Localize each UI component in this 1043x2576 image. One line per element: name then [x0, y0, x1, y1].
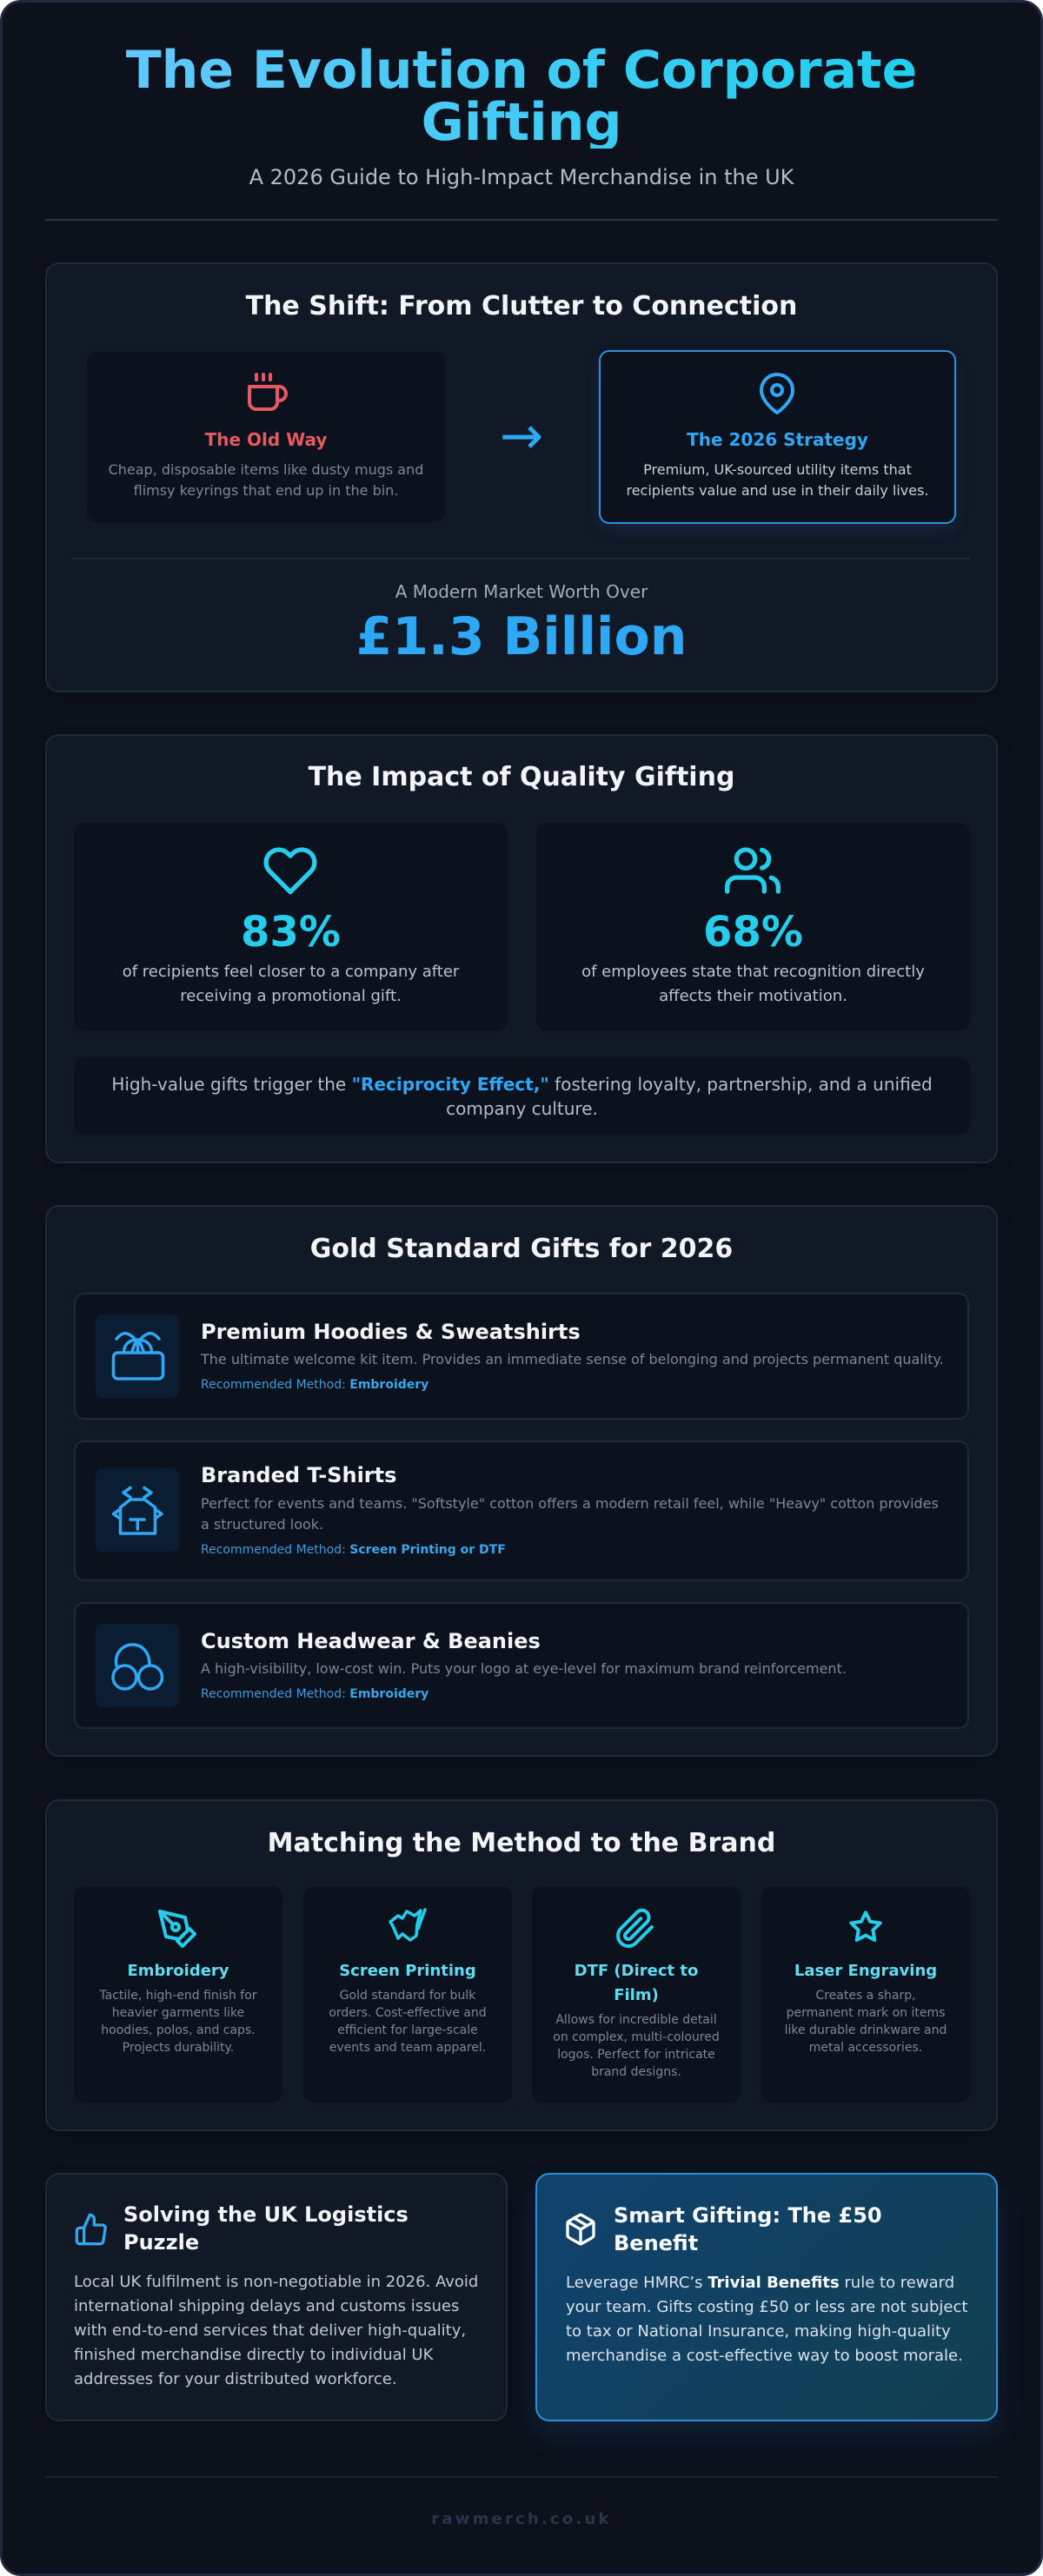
market label: A Modern Market Worth Over: [395, 581, 648, 602]
panel: gold standard gifts: [45, 1205, 998, 1757]
gift title: Custom Headwear & Beanies: [201, 1629, 541, 1653]
method description: Projects durability.: [123, 2041, 234, 2055]
smart gifting body: your team. Gifts costing £50 or less are not subject: [566, 2298, 967, 2316]
method title: Laser Engraving: [794, 1962, 937, 1980]
method description: brand designs.: [591, 2065, 681, 2079]
heading: impact: The Impact of Quality Gifting: [309, 762, 734, 792]
stat description: [581, 963, 925, 1005]
smart gifting title: Benefit: [614, 2231, 698, 2255]
logistics body: Local UK fulfilment is non-negotiable in 2026. Avoid: [74, 2273, 478, 2291]
smart gifting title: [614, 2203, 882, 2255]
gift description: Perfect for events and teams. "Softstyle" cotton offers a modern retail feel, while "Heavy" cotton provides: [201, 1495, 939, 1512]
heading: matching the method: Matching the Method to the Brand: [268, 1828, 775, 1858]
smart gifting body: merchandise a cost-effective way to boost morale.: [566, 2347, 963, 2365]
old way description: flimsy keyrings that end up in the bin.: [134, 482, 398, 499]
gift description: A high-visibility, low-cost win. Puts your logo at eye-level for maximum brand reinforcement.: [201, 1660, 847, 1677]
logistics title: Solving the UK Logistics: [123, 2202, 409, 2227]
stat card: 68%: [536, 823, 970, 1030]
smart gifting body: Leverage HMRC’s Trivial Benefits rule to reward: [566, 2274, 954, 2292]
recommended method: Recommended Method: Embroidery: [201, 1687, 428, 1701]
method card: embroidery: [74, 1886, 282, 2103]
strategy description: recipients value and use in their daily lives.: [626, 482, 929, 499]
old way description: [109, 461, 423, 499]
smart gifting title: Smart Gifting: The £50: [614, 2203, 882, 2228]
logistics body: international shipping delays and customs issues: [74, 2297, 459, 2315]
callout text: company culture.: [446, 1098, 598, 1119]
stat description: receiving a promotional gift.: [180, 987, 402, 1005]
stat description: affects their motivation.: [659, 987, 847, 1005]
method description: hoodies, polos, and caps.: [101, 2023, 256, 2037]
icon: users: [725, 847, 781, 894]
strategy description: Premium, UK-sourced utility items that: [643, 461, 912, 478]
logistics body: addresses for your distributed workforce.: [74, 2370, 397, 2388]
method title: [575, 1962, 698, 2004]
method description: metal accessories.: [809, 2041, 922, 2055]
subtitle: A 2026 Guide to High-Impact Merchandise in the UK: [249, 165, 794, 189]
icon: coffee mug: [248, 373, 288, 411]
panel: the shift: [45, 262, 998, 692]
strategy title: The 2026 Strategy: [687, 429, 868, 450]
icon tile: hoodie: [96, 1314, 179, 1398]
method description: [785, 1989, 947, 2055]
gift item: headwear: [74, 1602, 969, 1729]
callout text: High-value gifts trigger the "Reciprocity Effect," fostering loyalty, partnership, and a unified: [111, 1074, 933, 1095]
card: the old way: [87, 352, 445, 522]
method description: Creates a sharp,: [815, 1989, 916, 2003]
gift description: a structured look.: [201, 1516, 323, 1533]
card: the 2026 strategy: [599, 350, 956, 524]
recommended method: Recommended Method: Screen Printing or DTF: [201, 1543, 506, 1557]
gift item: hoodies: [74, 1293, 969, 1420]
icon: star: [849, 1910, 882, 1943]
method description: events and team apparel.: [329, 2041, 486, 2055]
recommended method: Recommended Method: Embroidery: [201, 1378, 428, 1392]
icon: package: [566, 2214, 595, 2245]
method title: Screen Printing: [339, 1962, 476, 1980]
method description: orders. Cost-effective and: [329, 2006, 487, 2020]
method card: laser engraving: [761, 1886, 970, 2103]
arrow: →: [500, 406, 543, 467]
smart gifting body: to tax or National Insurance, making high-quality: [566, 2322, 951, 2341]
icon: thumbs up: [75, 2214, 107, 2245]
title: Gifting: [422, 92, 621, 153]
strategy description: [626, 461, 929, 499]
method description: Allows for incredible detail: [555, 2013, 717, 2027]
footer: website: rawmerch.co.uk: [431, 2510, 612, 2528]
method description: [99, 1989, 257, 2055]
method description: Tactile, high-end finish for: [99, 1989, 257, 2003]
icon tile: t-shirt: [96, 1468, 179, 1552]
method description: efficient for large-scale: [337, 2023, 478, 2037]
method card: screen printing: [303, 1886, 512, 2103]
smart gifting body: [566, 2274, 967, 2365]
panel: uk logistics: [45, 2173, 508, 2421]
stat description: of recipients feel closer to a company after: [123, 963, 459, 981]
callout text: [111, 1074, 933, 1119]
method description: [553, 2013, 720, 2079]
gift description: The ultimate welcome kit item. Provides an immediate sense of belonging and projects permanent quality.: [201, 1351, 944, 1367]
market figure: £1.3 Billion: [356, 606, 687, 667]
panel: impact: [45, 734, 998, 1163]
gift title: Branded T-Shirts: [201, 1463, 396, 1487]
title: [87, 44, 956, 149]
method description: logos. Perfect for intricate: [557, 2048, 715, 2062]
gift item: t-shirts: [74, 1440, 969, 1581]
reciprocity callout: [74, 1057, 970, 1135]
icon: splatter: [389, 1908, 427, 1942]
method description: on complex, multi-coloured: [553, 2030, 720, 2044]
stat card: 83%: [74, 823, 508, 1030]
old way description: Cheap, disposable items like dusty mugs and: [109, 461, 423, 478]
method description: Gold standard for bulk: [340, 1989, 475, 2003]
old way title: The Old Way: [205, 429, 327, 450]
icon: paperclip: [616, 1908, 654, 1948]
panel: matching the method: [45, 1799, 998, 2131]
heading: the shift: The Shift: From Clutter to Connection: [246, 291, 797, 321]
panel: smart gifting: [535, 2173, 998, 2421]
method title: Embroidery: [127, 1962, 229, 1980]
logistics title: Puzzle: [123, 2230, 199, 2255]
method description: like durable drinkware and: [785, 2023, 947, 2037]
method title: Film): [614, 1986, 659, 2004]
title: The Evolution of Corporate: [126, 40, 917, 101]
icon tile: headwear: [96, 1624, 179, 1707]
method card: dtf: [532, 1886, 741, 2103]
logistics body: [74, 2273, 478, 2388]
stat description: [123, 963, 459, 1005]
logistics body: with end-to-end services that deliver high-quality,: [74, 2321, 466, 2340]
gift description: [201, 1495, 939, 1533]
method title: DTF (Direct to: [575, 1962, 698, 1980]
method description: heavier garments like: [112, 2006, 244, 2020]
icon: pen tool: [158, 1910, 196, 1948]
icon: heart: [264, 847, 316, 895]
logistics title: [123, 2202, 409, 2255]
method description: [329, 1989, 487, 2055]
stat description: of employees state that recognition directly: [581, 963, 925, 981]
stat value: 68%: [703, 908, 803, 957]
method description: permanent mark on items: [787, 2006, 945, 2020]
stat value: 83%: [241, 908, 341, 957]
heading: gold standard: Gold Standard Gifts for 2026: [310, 1234, 733, 1264]
gift title: Premium Hoodies & Sweatshirts: [201, 1320, 581, 1344]
logistics body: finished merchandise directly to individual UK: [74, 2346, 433, 2364]
icon: map pin: [760, 373, 794, 414]
